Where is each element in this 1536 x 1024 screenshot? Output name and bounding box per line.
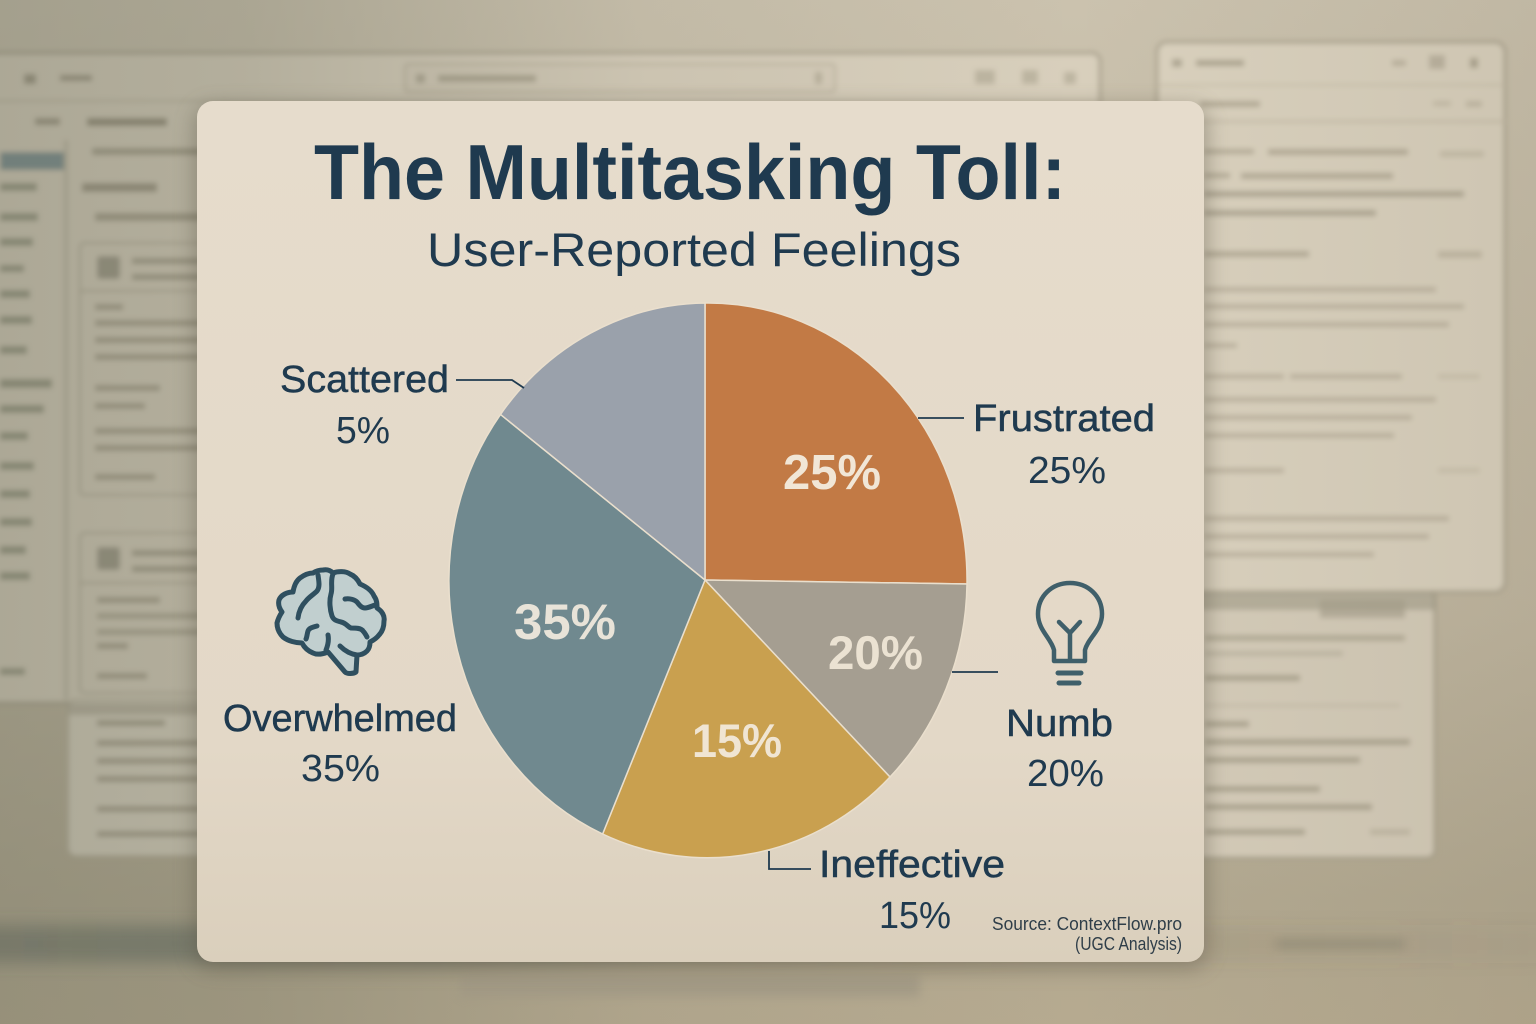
card shadow	[195, 106, 1207, 968]
background window: lower left	[68, 700, 368, 856]
label: Overwhelmed: Overwhelmed	[223, 698, 457, 740]
label: Frustrated: Frustrated	[973, 398, 1155, 440]
title: The Multitasking Toll:	[314, 128, 1066, 216]
label: Frustrated	[973, 398, 1155, 492]
pie value: 25%: 25%	[783, 446, 881, 500]
background window: upper right	[1157, 42, 1505, 592]
label: Scattered: Scattered	[280, 359, 449, 401]
blurred desk and monitor stand	[0, 925, 1536, 997]
label: Ineffective: 15%	[879, 895, 951, 937]
label: Overwhelmed: 35%	[301, 748, 380, 790]
leader line: Ineffective	[769, 851, 811, 869]
pie chart	[449, 303, 967, 858]
icon: light bulb	[1038, 583, 1102, 683]
label: Overwhelmed	[223, 698, 457, 790]
slice: Frustrated	[705, 303, 967, 584]
label: Frustrated: 25%	[1028, 450, 1106, 492]
pie value: 15%: 15%	[692, 714, 782, 767]
slice: Scattered	[500, 303, 705, 580]
leader line: Frustrated	[918, 417, 964, 419]
pie value: 35%: 35%	[514, 594, 616, 650]
pie value: 20%: 20%	[828, 626, 923, 679]
label: Ineffective: Ineffective	[819, 844, 1005, 886]
source note: Source: ContextFlow.pro	[992, 913, 1182, 934]
slice: Overwhelmed	[449, 414, 705, 834]
label: Scattered	[280, 359, 449, 452]
subtitle: User-Reported Feelings	[427, 223, 961, 276]
slice: Numb	[705, 580, 967, 777]
background window: lower right	[1100, 590, 1435, 858]
leader line: Numb	[952, 671, 998, 673]
label: Ineffective	[819, 844, 1005, 937]
background window: left main	[0, 53, 1100, 703]
source note: (UGC Analysis)	[1075, 934, 1182, 954]
slice: Ineffective	[603, 580, 890, 858]
label: Numb: Numb	[1006, 703, 1113, 745]
label: Numb	[1006, 703, 1113, 795]
label: Numb: 20%	[1027, 753, 1104, 795]
leader line: Scattered	[456, 380, 524, 388]
icon: brain	[277, 570, 384, 674]
source note	[992, 913, 1182, 954]
main card panel	[197, 101, 1204, 962]
label: Scattered: 5%	[336, 410, 390, 452]
